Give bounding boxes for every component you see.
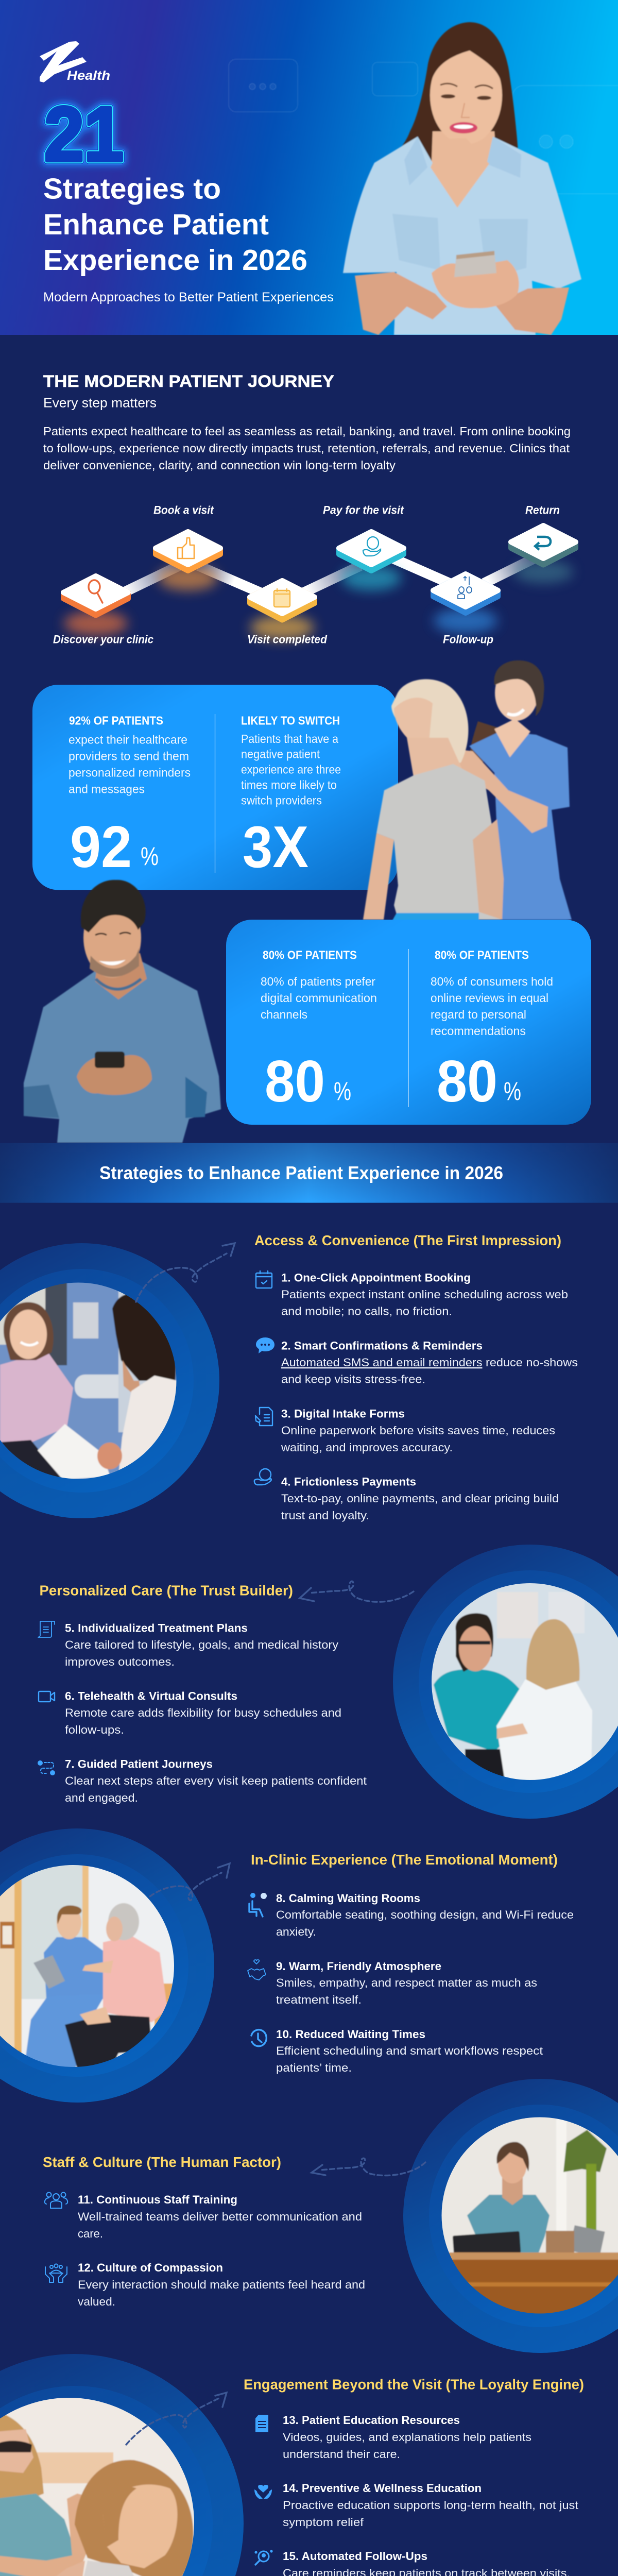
stat: 92% of patients: and messages	[68, 782, 145, 795]
item 15: automated follow-ups: 15. Automated Follow-Ups	[283, 2550, 427, 2563]
icon: document	[255, 2415, 268, 2432]
step 6: return	[511, 504, 576, 583]
item 13: patient education resources: Videos, guides, and explanations help patients	[283, 2431, 531, 2444]
stat: 80% online reviews	[431, 948, 553, 1114]
journey intro paragraph: deliver convenience, clarity, and connection win long-term loyalty	[43, 459, 396, 472]
item 8: calming waiting rooms: 8. Calming Waiting Rooms	[276, 1892, 420, 1905]
section: personalized care	[38, 1545, 618, 1819]
item 11: continuous staff training	[45, 2193, 362, 2240]
photo circle: doctor and patient	[393, 1545, 618, 1819]
step 5: follow-up	[433, 574, 498, 646]
item 10: reduced waiting times: 10. Reduced Waiting Times	[276, 2028, 425, 2041]
stat: 92% of patients: 92% OF PATIENTS	[69, 714, 163, 727]
icon: calendar	[256, 1271, 272, 1288]
item 4: frictionless payments: trust and loyalty.	[281, 1509, 369, 1522]
stat: 80% online reviews: recommendations	[431, 1024, 526, 1038]
item 10: reduced waiting times: patients’ time.	[276, 2061, 352, 2074]
item 6: telehealth and virtual consults: Remote care adds flexibility for busy schedules and	[65, 1706, 341, 1719]
photo: nurse and senior patient	[363, 660, 572, 922]
arrow	[312, 2158, 425, 2176]
hero title: Experience in 2026	[43, 244, 307, 277]
hero title	[43, 172, 307, 277]
stat: 80% prefer digital: 80	[265, 1049, 325, 1114]
stat: 80% online reviews: regard to personal	[431, 1008, 526, 1021]
step 3: visit completed: Visit completed	[247, 633, 328, 646]
section heading: Access & Convenience (The First Impression)	[254, 1232, 561, 1248]
item 2: smart confirmations and reminders: 2. Smart Confirmations & Reminders	[281, 1340, 483, 1352]
stat card: 92% and 3X	[32, 685, 398, 890]
item 6: telehealth and virtual consults: follow-ups.	[65, 1723, 124, 1736]
stat: likely to switch: switch providers	[241, 794, 322, 807]
item 7: guided patient journeys: Clear next steps after every visit keep patients confident	[65, 1774, 367, 1787]
stat: 80% prefer digital: 80% of patients prefer	[261, 975, 375, 988]
item 1: one-click appointment booking	[256, 1271, 568, 1318]
photo: woman with phone	[343, 22, 581, 335]
stat: 92% of patients: 92	[70, 815, 132, 880]
item 4: frictionless payments: 4. Frictionless Payments	[281, 1476, 416, 1488]
step 3: visit completed	[247, 581, 328, 646]
stat: 80% online reviews: 80	[437, 1049, 497, 1114]
icon: video camera	[39, 1691, 55, 1702]
item 2: smart confirmations and reminders: Automated SMS and email reminders reduce no-shows	[281, 1356, 578, 1369]
item 11: continuous staff training: Well-trained teams deliver better communication and	[78, 2210, 362, 2223]
logo: zHealth: Health	[67, 69, 110, 83]
item 10: reduced waiting times: Efficient scheduling and smart workflows respect	[276, 2044, 543, 2057]
section: access and convenience	[0, 1232, 578, 1522]
stat: 92% of patients: %	[141, 842, 159, 871]
journey subheading: Every step matters	[43, 395, 157, 410]
icon: hands with people	[45, 2264, 67, 2282]
stat: 92% of patients	[68, 714, 191, 880]
item 2: smart confirmations and reminders: and keep visits stress-free.	[281, 1373, 425, 1386]
stat: likely to switch: Patients that have a	[241, 732, 338, 745]
item 13: patient education resources: understand their care.	[283, 2448, 400, 2461]
icon: heart in hands	[254, 2485, 272, 2499]
patient journey path	[53, 504, 576, 646]
step 6: return: Return	[525, 504, 560, 516]
icon: route	[38, 1760, 55, 1775]
step 2: book a visit: Book a visit	[153, 504, 215, 516]
icon: return arrow	[535, 537, 551, 550]
item 2: smart confirmations and reminders	[256, 1337, 578, 1386]
item 11: continuous staff training: 11. Continuous Staff Training	[78, 2193, 237, 2206]
item 7: guided patient journeys	[38, 1758, 367, 1804]
icon: coin in hand	[363, 537, 381, 556]
item 10: reduced waiting times	[251, 2028, 543, 2074]
stat: 80% prefer digital: channels	[261, 1008, 307, 1021]
stat: likely to switch: negative patient	[241, 748, 320, 761]
stat: 92% of patients: personalized reminders	[68, 766, 191, 779]
item 12: culture of compassion: Every interaction should make patients feel heard and	[78, 2278, 365, 2291]
icon: form	[255, 1408, 272, 1426]
item 1: one-click appointment booking: 1. One-Click Appointment Booking	[281, 1272, 471, 1284]
section: in-clinic experience	[0, 1828, 574, 2103]
journey heading: THE MODERN PATIENT JOURNEY	[43, 372, 334, 391]
section: engagement beyond the visit	[0, 2354, 584, 2576]
item 1: one-click appointment booking: Patients expect instant online scheduling across web	[281, 1288, 568, 1301]
item 14: preventive and wellness education: 14. Preventive & Wellness Education	[283, 2482, 482, 2495]
item 8: calming waiting rooms: anxiety.	[276, 1925, 316, 1938]
neon number 21: 21	[44, 91, 124, 177]
stat: likely to switch: times more likely to	[241, 778, 337, 792]
stat: 92% of patients: providers to send them	[68, 750, 189, 763]
item 7: guided patient journeys: and engaged.	[65, 1791, 138, 1804]
item 5: individualized treatment plans: Care tailored to lifestyle, goals, and medical history	[65, 1638, 339, 1651]
stat: 80% online reviews: %	[504, 1077, 521, 1106]
item 9: warm friendly atmosphere: 9. Warm, Friendly Atmosphere	[276, 1960, 441, 1973]
step 4: pay for the visit	[323, 504, 405, 590]
neon number 21: 21	[44, 91, 124, 177]
icon: search person	[254, 2550, 273, 2565]
item 9: warm friendly atmosphere: Smiles, empathy, and respect matter as much as	[276, 1976, 537, 1989]
item 3: digital intake forms: Online paperwork before visits saves time, reduces	[281, 1424, 555, 1437]
logo: zHealth	[40, 41, 110, 83]
arrow	[136, 1243, 235, 1302]
step 1: discover your clinic: Discover your clinic	[53, 633, 153, 646]
arrow	[150, 1863, 230, 1901]
hero panel	[0, 0, 618, 335]
item 6: telehealth and virtual consults	[39, 1690, 341, 1736]
hero title: Strategies to	[43, 172, 221, 205]
photo circle: patient consultation	[0, 1243, 219, 1518]
photo circle: nurse with senior patient	[0, 1828, 214, 2103]
section: staff and culture	[43, 2079, 618, 2353]
photo circle: receptionist	[403, 2079, 618, 2353]
stat: 80% prefer digital: digital communication	[261, 991, 377, 1005]
step 4: pay for the visit: Pay for the visit	[323, 504, 405, 516]
icon: clock with arrow	[251, 2030, 266, 2046]
item 8: calming waiting rooms	[249, 1892, 574, 1938]
icon: plan scroll	[38, 1621, 55, 1637]
section heading: Engagement Beyond the Visit (The Loyalty Engine)	[244, 2377, 584, 2393]
stat: likely to switch: 3X	[243, 815, 308, 880]
item 11: continuous staff training: care.	[78, 2227, 103, 2240]
stat card: 80% and 80%	[226, 920, 591, 1125]
section heading: Staff & Culture (The Human Factor)	[43, 2154, 281, 2170]
item 15: automated follow-ups	[254, 2550, 570, 2576]
item 5: individualized treatment plans	[38, 1621, 339, 1668]
strategies banner	[0, 1143, 618, 1203]
photo: man with phone	[24, 880, 221, 1143]
strategies banner: Strategies to Enhance Patient Experience in 2026	[99, 1163, 503, 1183]
hero gradient background	[0, 0, 618, 335]
stat: 80% prefer digital: %	[334, 1077, 351, 1106]
item 13: patient education resources	[255, 2414, 531, 2461]
stat: 80% online reviews: 80% OF PATIENTS	[435, 948, 529, 961]
icon: team	[45, 2193, 67, 2208]
section heading: Personalized Care (The Trust Builder)	[39, 1583, 293, 1599]
icon: calendar	[274, 588, 290, 607]
item 3: digital intake forms	[255, 1408, 555, 1454]
photo circle: therapist with patient	[0, 2354, 244, 2576]
item 12: culture of compassion: 12. Culture of Compassion	[78, 2261, 223, 2274]
stat: likely to switch	[241, 714, 341, 880]
hero subtitle: Modern Approaches to Better Patient Experiences	[43, 290, 334, 304]
icon: chat bubble	[256, 1337, 274, 1353]
arrow	[300, 1581, 414, 1602]
stat: likely to switch: experience are three	[241, 763, 341, 776]
item 5: individualized treatment plans: 5. Individualized Treatment Plans	[65, 1622, 248, 1634]
journey intro paragraph: Patients expect healthcare to feel as seamless as retail, banking, and travel. From online booking	[43, 425, 571, 438]
stat: 80% prefer digital: 80% OF PATIENTS	[263, 948, 357, 961]
icon: magnifier	[89, 580, 102, 603]
item 14: preventive and wellness education	[254, 2482, 579, 2529]
icon: people with arrows	[458, 577, 472, 599]
arrow	[126, 2393, 227, 2445]
stat: likely to switch: LIKELY TO SWITCH	[241, 714, 340, 727]
icon: coin in hand	[254, 1469, 271, 1485]
item 6: telehealth and virtual consults: 6. Telehealth & Virtual Consults	[65, 1690, 237, 1702]
journey intro paragraph	[43, 425, 571, 472]
item 13: patient education resources: 13. Patient Education Resources	[283, 2414, 460, 2427]
item 12: culture of compassion: valued.	[78, 2295, 115, 2308]
neon number 21: 21	[44, 91, 124, 177]
item 7: guided patient journeys: 7. Guided Patient Journeys	[65, 1758, 213, 1770]
item 8: calming waiting rooms: Comfortable seating, soothing design, and Wi-Fi reduce	[276, 1908, 574, 1921]
stat: 92% of patients: expect their healthcare	[68, 733, 187, 747]
neon number 21: 21	[44, 91, 124, 177]
item 5: individualized treatment plans: improves outcomes.	[65, 1655, 175, 1668]
stat: 80% online reviews: online reviews in equal	[431, 991, 548, 1005]
icon: thumbs up	[178, 538, 194, 558]
item 3: digital intake forms: waiting, and improves accuracy.	[281, 1441, 453, 1454]
item 9: warm friendly atmosphere: treatment itself.	[276, 1993, 362, 2006]
neon number 21: 21	[44, 91, 124, 177]
step 2: book a visit	[153, 504, 220, 590]
item 12: culture of compassion	[45, 2261, 365, 2308]
item 4: frictionless payments	[254, 1469, 559, 1522]
faint chat bubbles	[229, 59, 618, 194]
journey intro paragraph: to follow-ups, experience now directly impacts trust, retention, referrals, and revenue. Clinics that	[43, 442, 570, 455]
item 3: digital intake forms: 3. Digital Intake Forms	[281, 1408, 405, 1420]
stat: 80% online reviews: 80% of consumers hold	[431, 975, 553, 988]
step 5: follow-up: Follow-up	[443, 633, 493, 646]
item 9: warm friendly atmosphere	[248, 1960, 537, 2006]
stat: 80% prefer digital	[261, 948, 377, 1114]
item 1: one-click appointment booking: and mobile; no calls, no friction.	[281, 1305, 452, 1318]
icon: heart and handshake	[248, 1960, 266, 1980]
section heading: In-Clinic Experience (The Emotional Moment)	[251, 1852, 558, 1868]
connectors	[124, 555, 533, 592]
icon: seated person	[249, 1893, 267, 1917]
item 4: frictionless payments: Text-to-pay, online payments, and clear pricing build	[281, 1492, 559, 1505]
step 1: discover your clinic	[53, 576, 153, 646]
hero title: Enhance Patient	[43, 208, 269, 241]
item 14: preventive and wellness education: symptom relief	[283, 2516, 364, 2529]
item 14: preventive and wellness education: Proactive education supports long-term health, not just	[283, 2499, 579, 2512]
